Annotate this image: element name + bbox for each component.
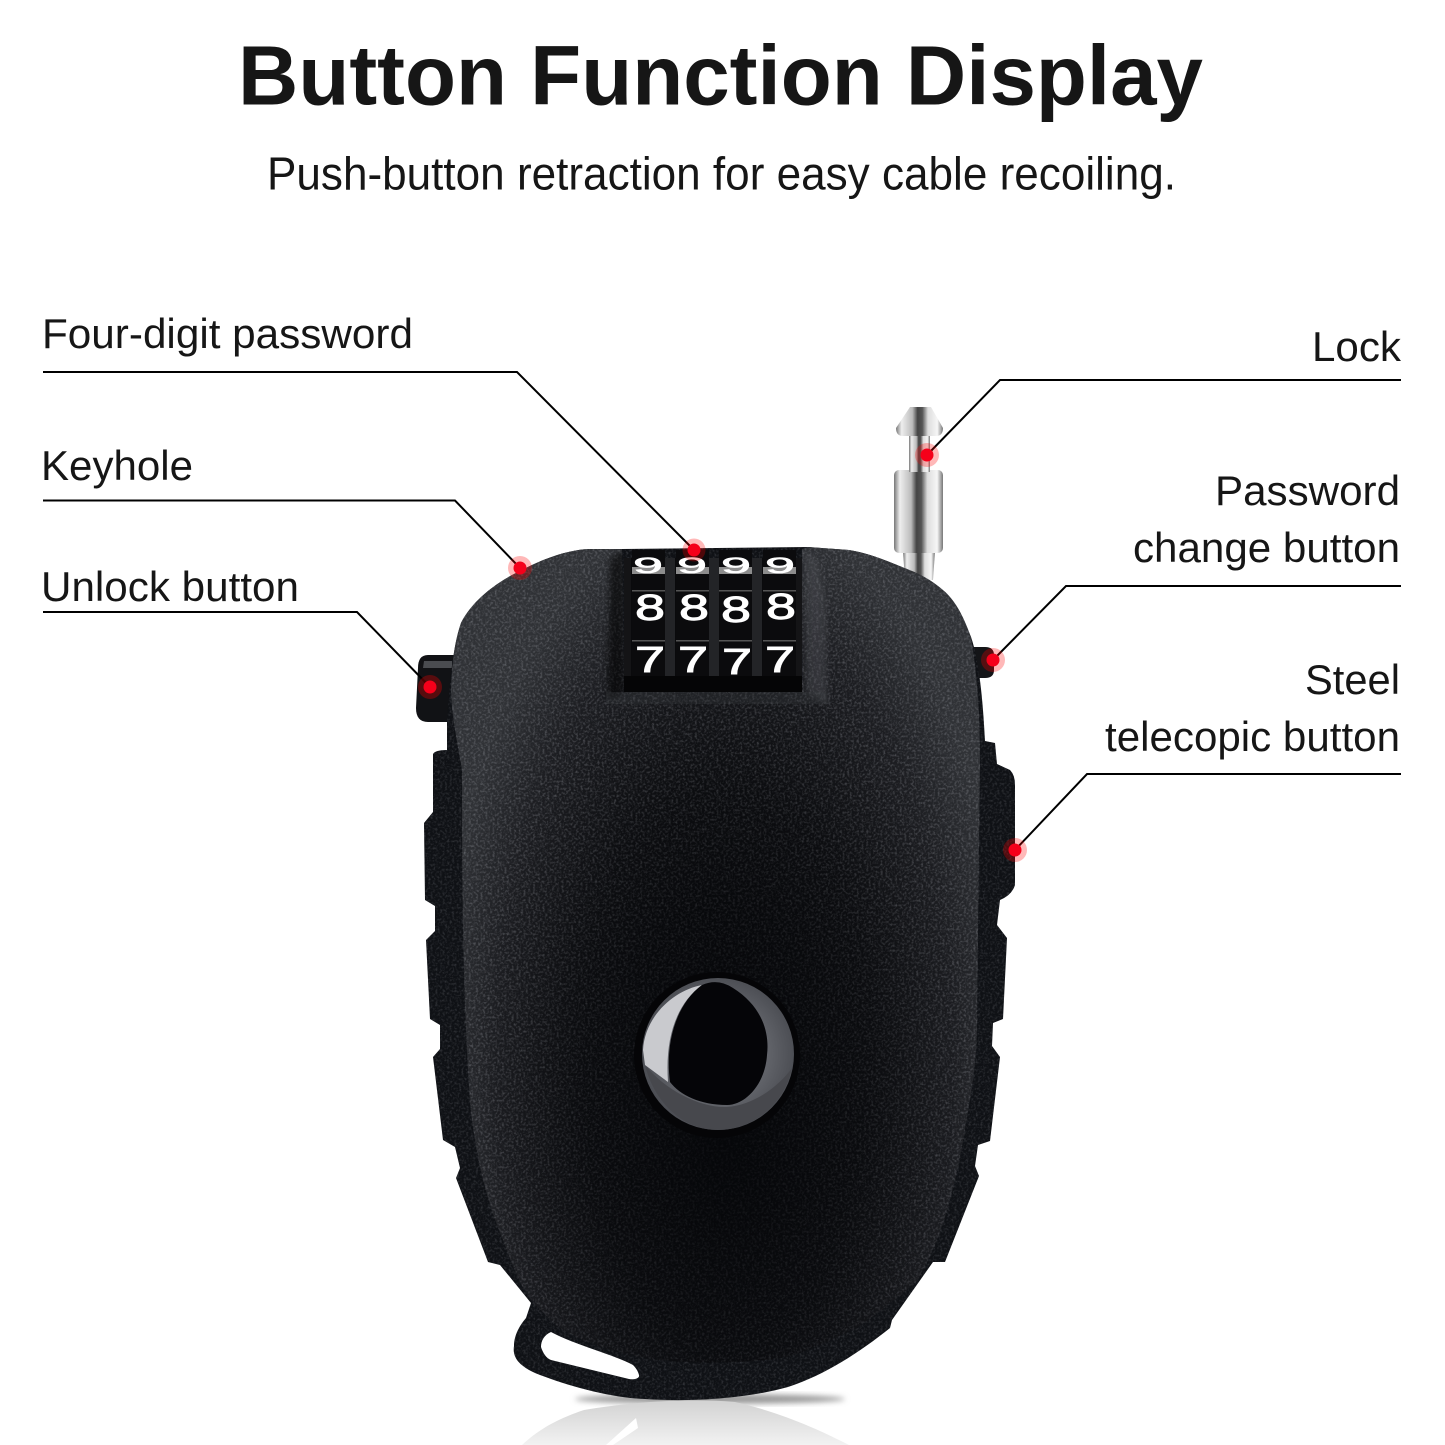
callout: Four-digit password: Four-digit password	[42, 310, 413, 357]
callout: Password change button: Password	[1215, 467, 1400, 514]
callout: Steel telecopic button: Steel	[1305, 656, 1400, 703]
callout: Lock: Lock	[1312, 323, 1402, 370]
callout: Password change button	[981, 467, 1401, 672]
panel: combination dial window	[624, 550, 802, 692]
product: retractable cable lock	[410, 407, 1020, 1405]
callout: Unlock button	[41, 563, 442, 699]
dial: column 1: 7	[635, 639, 665, 680]
icon: unlock button	[416, 655, 455, 722]
dial: column 3: 7	[722, 641, 752, 682]
dial: column 2: 8	[679, 587, 709, 628]
icon: ground reflection and shadow	[522, 1394, 849, 1445]
dial: column 2	[676, 550, 709, 680]
icon: body flange with grips and cable tab	[410, 540, 1020, 1405]
callout: Password change button: change button	[1133, 524, 1400, 571]
callout: Unlock button: Unlock button	[41, 563, 299, 610]
dial: column 2: 9	[677, 553, 707, 578]
icon: retract push button	[634, 972, 800, 1138]
title: Button Function Display	[238, 28, 1203, 122]
callout: Four-digit password	[42, 310, 706, 562]
dial: column 4: 9	[765, 553, 795, 578]
dial: column 2: 7	[678, 639, 708, 680]
dial: column 4: 8	[766, 586, 796, 627]
icon: password change button	[970, 647, 994, 678]
dial: column 1	[632, 550, 665, 680]
subtitle: Push-button retraction for easy cable recoiling.	[267, 148, 1176, 200]
dial: column 3	[719, 550, 752, 682]
dial: column 3: 9	[721, 553, 751, 578]
dial: column 1: 9	[633, 553, 663, 578]
callout: Lock	[915, 323, 1402, 467]
callout: Keyhole	[41, 442, 532, 580]
callout: Steel telecopic button: telecopic button	[1105, 713, 1400, 760]
dial: column 1: 8	[635, 587, 665, 628]
callout: Keyhole: Keyhole	[41, 442, 193, 489]
dial: column 4	[763, 550, 796, 680]
dial: column 4: 7	[765, 639, 795, 680]
callout: Steel telecopic button	[1003, 656, 1401, 862]
icon: metal lock plug	[894, 407, 943, 580]
icon: textured dome shell	[440, 540, 1000, 1370]
dial: column 3: 8	[721, 589, 751, 630]
